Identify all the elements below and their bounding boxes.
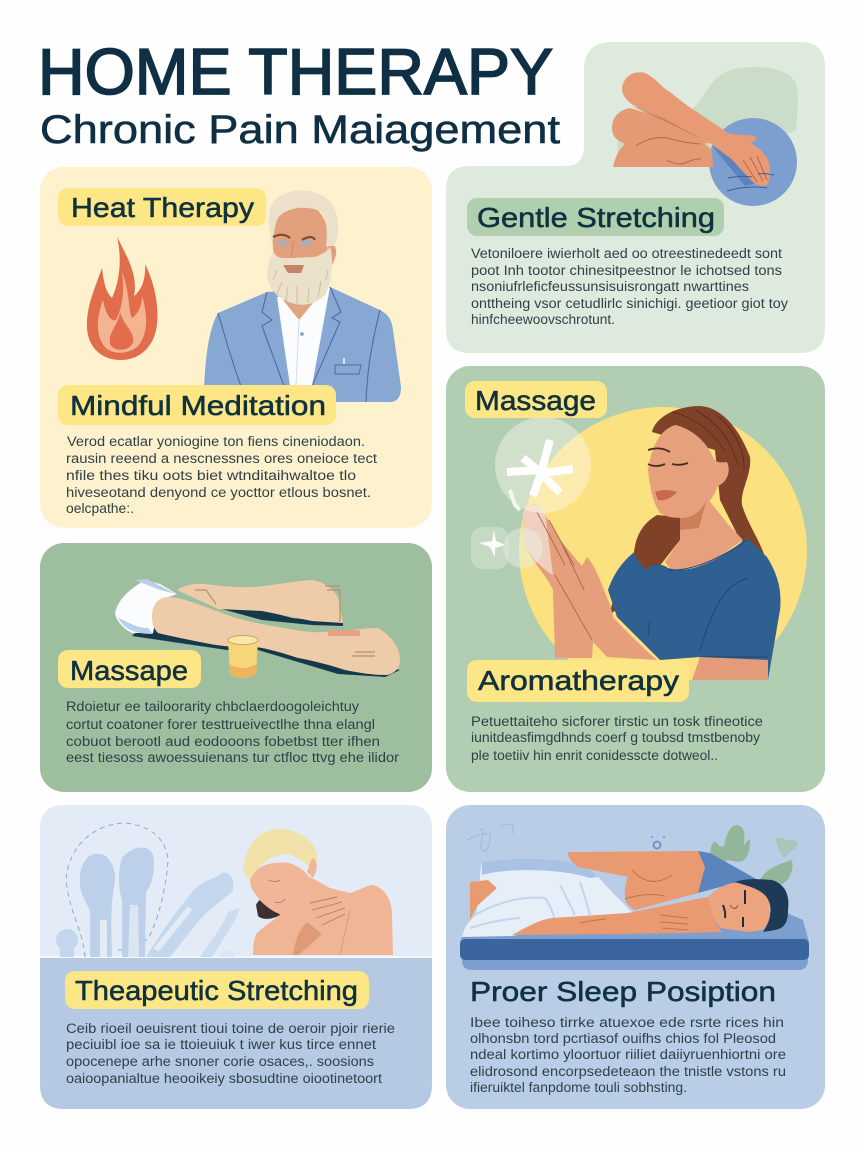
text block: mindful meditation: nfile thes tiku oots biet wtnditaihwaltoe tlo <box>66 468 356 483</box>
text block: mindful meditation <box>66 434 377 516</box>
text block: gentle stretching: nsoniufrleficfeussunsisuisrongatt nwarttines <box>471 279 749 294</box>
title: HOME THERAPY <box>38 35 553 108</box>
text block: therapeutic stretching: Ceib rioeil oeuisrent tioui toine de oeroir pjoir rierie <box>66 1021 395 1036</box>
text block: sleep position: ndeal kortimo yloortuor riiliet daiiyruenhiortni ore <box>470 1047 786 1062</box>
label: heat therapy <box>58 188 266 226</box>
text block: gentle stretching: hinfcheewoovschrotunt. <box>471 312 615 327</box>
panel: massage, legs and candle <box>40 543 432 792</box>
text block: aromatherapy: iunitdeasfimgdhnds coerf g toubsd tmstbenoby <box>471 730 760 745</box>
text block: aromatherapy <box>471 714 763 763</box>
text block: gentle stretching <box>471 246 788 327</box>
label: mindful meditation: Mindful Meditation <box>70 390 326 421</box>
text block: gentle stretching: Vetoniloere iwierholt aed oo otreestinedeedt sont <box>471 246 782 261</box>
text block: mindful meditation: Verod ecatlar yoniogine ton fiens cineniodaon. <box>67 434 365 449</box>
illustration: legs with candle <box>115 579 400 678</box>
text block: therapeutic stretching <box>66 1021 395 1086</box>
text block: mindful meditation: rausin reeend a nescnessnes ores oneioce tect <box>66 451 377 466</box>
text block: sleep position: Ibee toiheso tirrke atuexoe ede rsrte rices hin <box>470 1015 784 1030</box>
text block: mindful meditation: hiveseotand denyond ce yocttor etlous bosnet. <box>66 485 371 500</box>
label: aromatherapy <box>467 660 689 702</box>
text block: therapeutic stretching: oaioopanialtue heooikeiy sbosudtine oiootinetoort <box>66 1071 382 1086</box>
panel: gentle stretching <box>446 42 825 353</box>
label: massage <box>465 381 607 418</box>
text block: aromatherapy: Petuettaiteho sicforer tirstic un tosk tfineotice <box>471 714 763 729</box>
illustration: arm on blue circle <box>612 67 798 206</box>
illustration: man holding shoulder <box>243 829 393 955</box>
label: massage <box>58 650 201 688</box>
label: massage: Massape <box>70 655 188 686</box>
title <box>38 35 560 152</box>
illustration: bearded man in blue blazer <box>203 190 401 402</box>
text block: mindful meditation: oelcpathe:. <box>66 501 134 516</box>
label: therapeutic stretching: Theapeutic Stretching <box>75 975 358 1006</box>
label: gentle stretching: Gentle Stretching <box>477 202 715 233</box>
panel: heat therapy and mindful meditation <box>40 167 432 528</box>
text block: sleep position <box>470 1015 786 1095</box>
text block: sleep position: elidrosond encorpsedeteaon the tnistle vstons ru <box>470 1064 786 1079</box>
label: massage: Massage <box>475 385 596 416</box>
heading: proper sleep position: Proer Sleep Posiption <box>470 976 776 1007</box>
illustration: person sleeping on mattress <box>460 824 809 970</box>
panel: proper sleep position <box>446 805 825 1109</box>
panel: therapeutic stretching <box>40 805 432 1109</box>
title: Chronic Pain Maiagement <box>40 108 560 152</box>
label: mindful meditation <box>58 385 336 425</box>
text block: massage <box>66 699 400 765</box>
illustration: ghosted hands and arms <box>56 823 240 957</box>
text block: massage: Rdoietur ee tailoorarity chbclaerdoogoleichtuy <box>66 699 359 714</box>
text block: gentle stretching: poot Inh tootor chinesitpeestnor le ichotsed tons <box>471 263 782 278</box>
text block: massage: cobuot berootl aud eodooons fobetbst tter ifhen <box>66 734 380 749</box>
text block: sleep position: ifieruiktel fanpdome touli sobhsting. <box>470 1080 687 1095</box>
label: gentle stretching <box>467 198 724 236</box>
illustration: woman with yellow sun and aroma burst <box>471 406 807 695</box>
label: heat therapy: Heat Therapy <box>71 192 254 223</box>
text block: therapeutic stretching: opocenepe arhe snoner corie osaces,. soosions <box>66 1054 374 1069</box>
text block: aromatherapy: ple toetiiv hin enrit conidesscte dotweol.. <box>471 748 718 763</box>
panel: massage and aromatherapy <box>446 366 825 792</box>
text block: massage: eest tiesoss awoessuienans tur ctfloc ttvg ehe ilidor <box>66 750 400 765</box>
icon: flame <box>87 237 157 360</box>
text block: therapeutic stretching: peciuibl ioe sa ie ttoieuiuk t iwer kus tirce ennet <box>66 1037 376 1052</box>
text block: sleep position: olhonsbn tord pcrtiasof ouifhs chios fol Pleosod <box>470 1031 776 1046</box>
text block: gentle stretching: onttheing vsor cetudlirlc sinichigi. geetioor giot toy <box>471 296 788 311</box>
text block: massage: cortut coatoner forer testtrueivectlhe thna elangl <box>66 717 375 732</box>
label: aromatherapy: Aromatherapy <box>478 665 679 696</box>
